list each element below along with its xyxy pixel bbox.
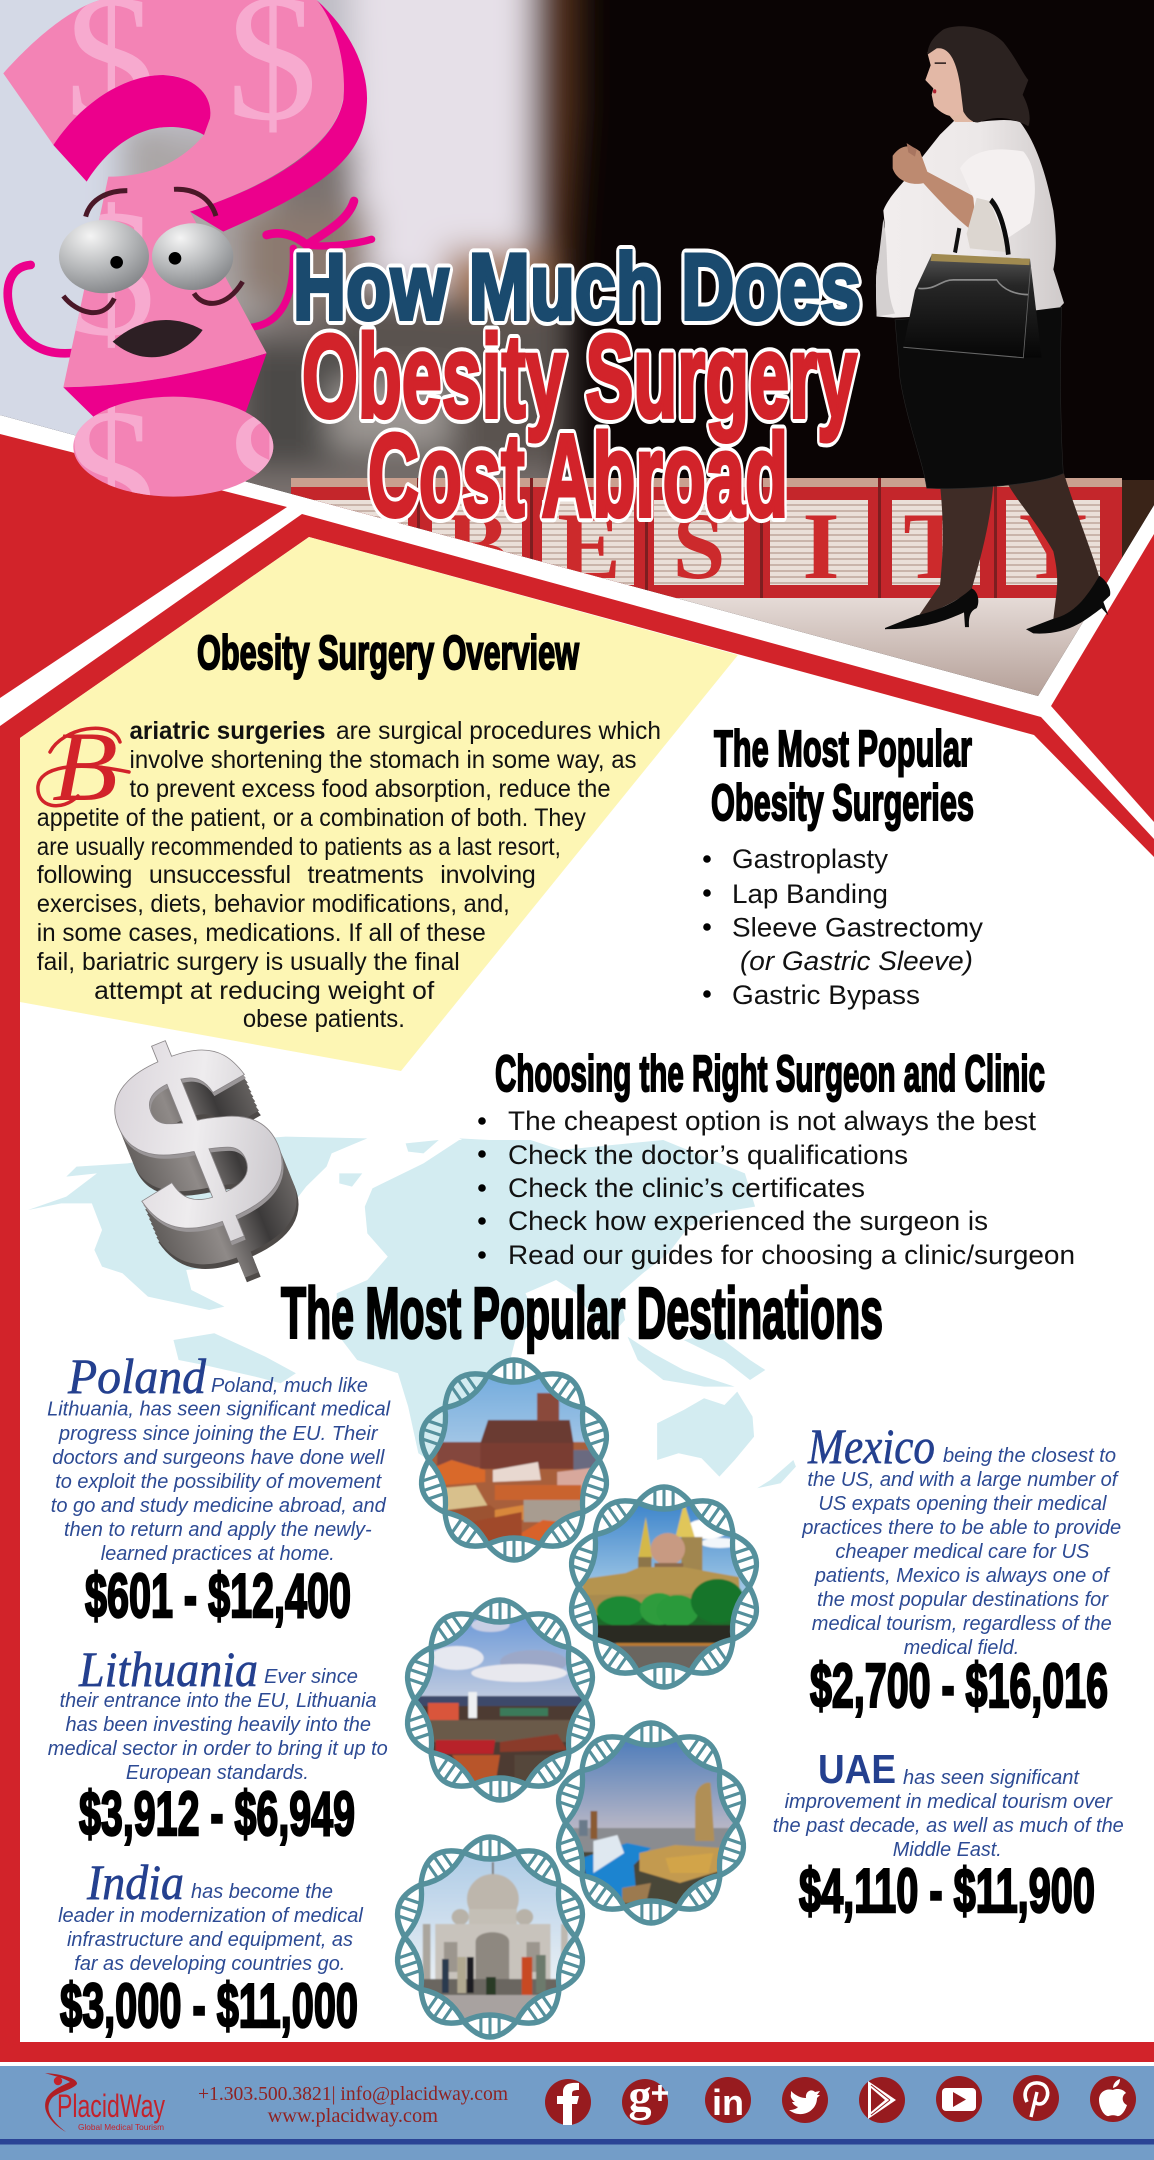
photo frame: Lithuania bbox=[401, 1600, 599, 1806]
heading: overview: Obesity Surgery Overview bbox=[197, 627, 579, 680]
list: surgeries: (or Gastric Sleeve) bbox=[740, 946, 973, 976]
India description: leader in modernization of medical bbox=[58, 1904, 364, 1927]
overview paragraph: are usually recommended to patients as a last resort, bbox=[37, 833, 561, 861]
hair bbox=[927, 26, 1030, 126]
Mexico description: practices there to be able to provide bbox=[801, 1516, 1121, 1539]
question mark character: $ bbox=[65, 372, 156, 573]
letter blocks OBESITY: T bbox=[903, 493, 967, 599]
title line 3: Cost Abroad bbox=[368, 410, 788, 542]
icon: linkedin bbox=[705, 2077, 751, 2123]
Poland name: Poland bbox=[67, 1348, 207, 1404]
legs bbox=[917, 484, 993, 619]
red triangle left bbox=[0, 434, 287, 698]
icon: 3D dollar sign: $ bbox=[83, 1007, 335, 1333]
Mexico description bbox=[801, 1444, 1121, 1659]
icon: google plus: g bbox=[628, 2070, 652, 2121]
overview paragraph bbox=[37, 717, 661, 1033]
title line 3 bbox=[368, 410, 788, 542]
list: choosing tips: The cheapest option is not always the best bbox=[508, 1106, 1037, 1136]
Poland description bbox=[47, 1374, 392, 1565]
UAE description: Middle East. bbox=[893, 1838, 1002, 1861]
icon: 3D dollar sign: $ bbox=[77, 993, 329, 1319]
Lithuania description: has been investing heavily into the bbox=[66, 1713, 371, 1736]
UAE block bbox=[773, 1746, 1124, 1926]
heading: popular surgeries bbox=[711, 720, 974, 831]
Poland description: then to return and apply the newly- bbox=[64, 1518, 372, 1541]
icon: 3D dollar sign: $ bbox=[70, 976, 322, 1301]
India price: $3,000 - $11,000 bbox=[60, 1972, 358, 2041]
dollar watermarks bbox=[72, 0, 312, 348]
Poland description: learned practices at home. bbox=[101, 1542, 335, 1565]
icon: youtube bbox=[936, 2076, 982, 2122]
photo frame: Mexico bbox=[565, 1487, 763, 1693]
Mexico description: being the closest to bbox=[943, 1444, 1116, 1467]
Poland description: to exploit the possibility of movement bbox=[55, 1470, 382, 1493]
contact details: www.placidway.com bbox=[268, 2105, 438, 2127]
heading: popular surgeries: Obesity Surgeries bbox=[711, 774, 974, 831]
Mexico description: medical field. bbox=[904, 1636, 1019, 1659]
overview paragraph: ariatric surgeries bbox=[130, 717, 326, 745]
UAE description: improvement in medical tourism over bbox=[785, 1790, 1113, 1813]
icon: linkedin: in bbox=[712, 2082, 744, 2123]
Poland block bbox=[47, 1348, 392, 1631]
India description: has become the bbox=[191, 1880, 333, 1903]
Lithuania description bbox=[48, 1665, 388, 1784]
handbag bbox=[903, 200, 1042, 358]
dollar watermarks: $ bbox=[65, 173, 156, 374]
Lithuania price: $3,912 - $6,949 bbox=[79, 1780, 355, 1849]
footer panel bbox=[0, 2066, 1154, 2160]
letter blocks OBESITY: S bbox=[673, 493, 725, 599]
forearm and hand bbox=[893, 146, 977, 234]
Mexico description: patients, Mexico is always one of bbox=[814, 1564, 1111, 1587]
mouth bbox=[113, 320, 203, 357]
icon: 3D dollar sign: $ bbox=[74, 984, 325, 1309]
icon: 3D dollar sign: $ bbox=[72, 979, 323, 1305]
overview paragraph: attempt at reducing weight of bbox=[94, 977, 434, 1005]
Lithuania name: Lithuania bbox=[78, 1641, 258, 1697]
woman with handbag bbox=[876, 26, 1110, 634]
overview paragraph: involve shortening the stomach in some way, as bbox=[130, 746, 636, 774]
overview paragraph: following unsuccessful treatments involving bbox=[37, 861, 536, 889]
icon: twitter bbox=[782, 2077, 828, 2123]
drop cap B bbox=[38, 711, 129, 822]
UAE description: has seen significant bbox=[903, 1766, 1080, 1789]
list: choosing tips: Read our guides for choosing a clinic/surgeon bbox=[508, 1240, 1075, 1270]
Poland price: $601 - $12,400 bbox=[85, 1562, 351, 1631]
overview paragraph: obese patients. bbox=[243, 1005, 405, 1033]
footer line bbox=[0, 2139, 1154, 2144]
Poland description: to go and study medicine abroad, and bbox=[51, 1494, 386, 1517]
letter blocks OBESITY: E bbox=[557, 493, 621, 599]
heading: popular surgeries: The Most Popular bbox=[714, 720, 972, 777]
contact details bbox=[198, 2083, 508, 2127]
icon: 3D dollar sign: $ bbox=[79, 998, 331, 1323]
list: choosing tips: Check the doctor’s qualifications bbox=[508, 1140, 908, 1170]
icon: google plus bbox=[622, 2070, 668, 2125]
Poland description: doctors and surgeons have done well bbox=[52, 1446, 386, 1469]
Mexico name: Mexico bbox=[807, 1418, 935, 1474]
list: surgeries: Lap Banding bbox=[732, 879, 888, 909]
icon: 3D dollar sign: $ bbox=[81, 1003, 333, 1328]
contact details: +1.303.500.3821| info@placidway.com bbox=[198, 2083, 508, 2105]
list: surgeries bbox=[703, 844, 984, 1010]
overview paragraph: in some cases, medications. If all of these bbox=[37, 919, 486, 947]
India name: India bbox=[86, 1854, 184, 1910]
skirt bbox=[895, 307, 1063, 489]
overview paragraph: to prevent excess food absorption, reduce the bbox=[130, 775, 610, 803]
Lithuania description: Ever since bbox=[264, 1665, 358, 1688]
PlacidWay logo: Global Medical Tourism bbox=[78, 2122, 164, 2132]
India description: far as developing countries go. bbox=[74, 1952, 345, 1975]
red diagonal band and left border bbox=[0, 514, 1154, 2042]
title bbox=[293, 234, 861, 542]
overview paragraph: are surgical procedures which bbox=[336, 717, 661, 745]
question mark character bbox=[3, 0, 376, 497]
letter blocks OBESITY: I bbox=[803, 493, 839, 599]
photo frame: India bbox=[391, 1837, 589, 2037]
list: choosing tips: Check how experienced the surgeon is bbox=[508, 1206, 988, 1236]
Mexico description: the US, and with a large number of bbox=[807, 1468, 1120, 1491]
letter blocks OBESITY: B bbox=[445, 493, 509, 599]
bottom red bar bbox=[0, 2042, 1154, 2062]
India block bbox=[58, 1854, 364, 2041]
icon: pinterest bbox=[1013, 2075, 1059, 2121]
title line 2 bbox=[302, 311, 857, 443]
photo frame: Poland bbox=[415, 1360, 613, 1562]
sleeve bbox=[960, 149, 1035, 238]
Lithuania description: their entrance into the EU, Lithuania bbox=[60, 1689, 377, 1712]
yellow overview panel bbox=[20, 537, 738, 1071]
Mexico description: cheaper medical care for US bbox=[835, 1540, 1090, 1563]
question mark character: $ bbox=[227, 372, 318, 573]
Lithuania block bbox=[48, 1641, 388, 1849]
neck and face bbox=[937, 97, 973, 122]
PlacidWay logo: PlacidWay bbox=[57, 2088, 165, 2124]
India description bbox=[58, 1880, 364, 1975]
UAE description bbox=[773, 1766, 1124, 1861]
list: choosing tips: Check the clinic’s certificates bbox=[508, 1173, 865, 1203]
photo frame: UAE bbox=[552, 1723, 750, 1923]
shoes bbox=[885, 588, 978, 629]
drop cap B: B bbox=[52, 711, 118, 822]
overview paragraph: exercises, diets, behavior modifications, and, bbox=[37, 890, 510, 918]
Mexico description: US expats opening their medical bbox=[818, 1492, 1108, 1515]
brows and lids bbox=[63, 189, 243, 313]
list: choosing tips bbox=[478, 1106, 1075, 1270]
icon: apple bbox=[1090, 2076, 1136, 2122]
Lithuania description: European standards. bbox=[126, 1761, 309, 1784]
Poland description: Lithuania, has seen significant medical bbox=[47, 1398, 392, 1421]
hero photo background bbox=[0, 0, 1154, 706]
icon: 3D dollar sign: $ bbox=[75, 989, 327, 1314]
letter blocks OBESITY: O bbox=[324, 493, 398, 599]
icon: facebook bbox=[545, 2079, 591, 2125]
list: surgeries: Sleeve Gastrectomy bbox=[732, 912, 984, 942]
brown glow right of blocks bbox=[1122, 480, 1154, 558]
Poland description: Poland, much like bbox=[211, 1374, 368, 1397]
list: surgeries: Gastroplasty bbox=[732, 844, 889, 874]
icon: 3D dollar sign: $ bbox=[87, 1016, 338, 1342]
Poland description: progress since joining the EU. Their bbox=[58, 1422, 379, 1445]
Lithuania description: medical sector in order to bring it up to bbox=[48, 1737, 388, 1760]
PlacidWay logo bbox=[45, 2073, 165, 2132]
India description: infrastructure and equipment, as bbox=[67, 1928, 353, 1951]
Mexico description: the most popular destinations for bbox=[817, 1588, 1109, 1611]
arms bbox=[8, 201, 372, 353]
Mexico description: medical tourism, regardless of the bbox=[812, 1612, 1112, 1635]
Mexico block bbox=[801, 1418, 1121, 1721]
blouse bbox=[876, 120, 1064, 318]
icon: 3D dollar sign: $ bbox=[85, 1012, 336, 1337]
UAE name: UAE bbox=[818, 1746, 896, 1792]
letter blocks OBESITY bbox=[291, 478, 1122, 599]
overview paragraph: appetite of the patient, or a combination of both. They bbox=[37, 804, 586, 832]
letter blocks OBESITY: Y bbox=[1019, 493, 1087, 599]
world map bbox=[28, 1137, 796, 1488]
icon: play store bbox=[859, 2077, 905, 2123]
red triangle right bbox=[1051, 534, 1154, 822]
UAE description: the past decade, as well as much of the bbox=[773, 1814, 1124, 1837]
title line 1: How Much Does bbox=[293, 234, 861, 339]
list: surgeries: Gastric Bypass bbox=[732, 980, 920, 1010]
title line 1: How Much Does bbox=[293, 234, 861, 339]
floor bbox=[670, 596, 1084, 696]
title line 3: Cost Abroad bbox=[368, 410, 788, 542]
eyes bbox=[59, 220, 149, 293]
overview paragraph: fail, bariatric surgery is usually the final bbox=[37, 948, 460, 976]
